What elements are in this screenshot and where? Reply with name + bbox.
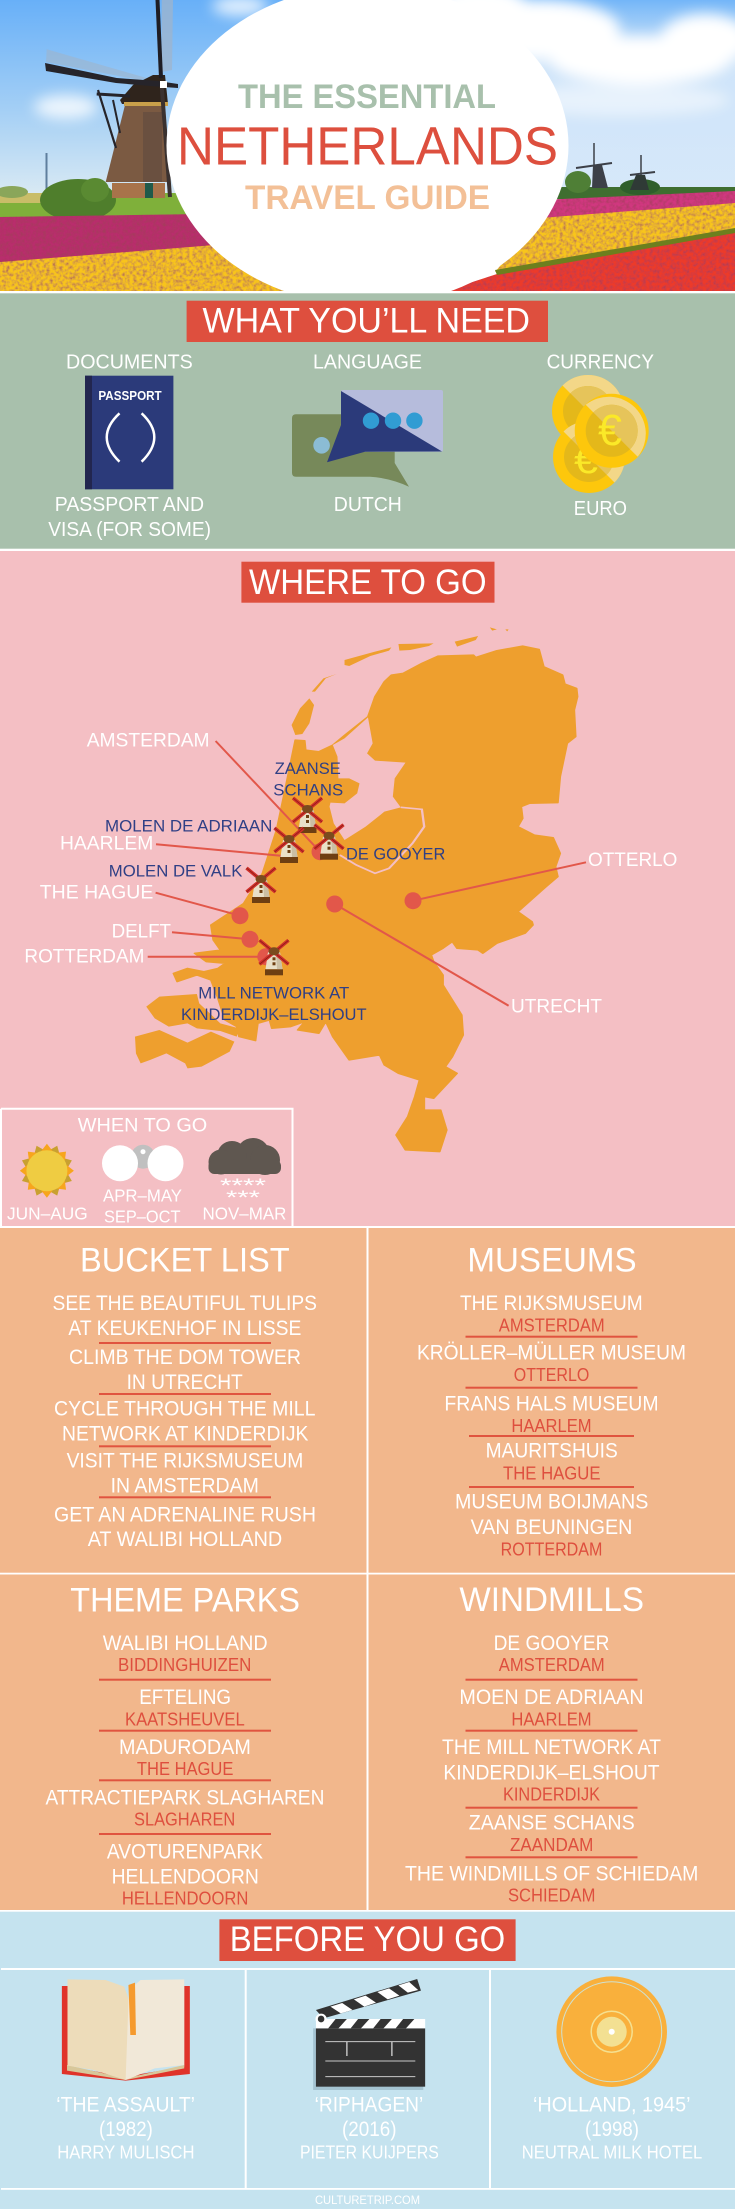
footer: culturetrip.com: CULTURETRIP.COM <box>315 2195 420 2207</box>
distant windmills <box>593 143 595 168</box>
city labels: THE HAGUE <box>40 881 153 903</box>
panel: windmills <box>368 1574 735 1910</box>
windmill labels: MOLEN DE VALK <box>109 861 243 880</box>
text: the assault: (1982) <box>99 2118 153 2141</box>
white separator under hero <box>0 291 735 293</box>
icon: windmill Molen de Valk <box>246 868 276 903</box>
windmill items: ZAANSE SCHANS <box>469 1812 635 1835</box>
city labels: ROTTERDAM <box>24 946 144 968</box>
heading: where to go: WHERE TO GO <box>249 563 487 602</box>
icon: passport <box>85 376 173 489</box>
title line: Travel Guide: TRAVEL GUIDE <box>245 179 490 217</box>
label: documents: DOCUMENTS <box>66 352 193 374</box>
bucket list items: AT KEUKENHOF IN LISSE <box>68 1317 301 1340</box>
theme park items: WALIBI HOLLAND <box>103 1632 268 1655</box>
theme park items <box>46 1632 324 1908</box>
windmill items: AMSTERDAM <box>499 1655 605 1675</box>
bucket list items: IN UTRECHT <box>127 1371 243 1394</box>
windmill items: ZAANDAM <box>510 1835 593 1855</box>
museum items: THE RIJKSMUSEUM <box>460 1292 643 1315</box>
icon: vinyl record <box>556 1976 667 2087</box>
line: amsterdam <box>216 741 320 852</box>
city labels <box>24 730 677 1018</box>
label: currency: CURRENCY <box>547 352 654 374</box>
title line: Netherlands: NETHERLANDS <box>177 116 558 176</box>
theme park items: ATTRACTIEPARK SLAGHAREN <box>46 1786 324 1809</box>
panel: what you'll need <box>0 293 735 549</box>
line: otterlo <box>413 862 586 901</box>
theme park items: THE HAGUE <box>137 1759 233 1779</box>
panel: museums <box>368 1228 735 1573</box>
text: riphagen: (2016) <box>342 2118 397 2141</box>
theme park items: MADURODAM <box>119 1736 251 1759</box>
icon: passport: PASSPORT <box>98 389 162 403</box>
line: utrecht <box>335 904 509 1006</box>
windmill items <box>405 1632 698 1906</box>
icon: windmill De Gooyer <box>314 825 344 860</box>
text: the assault: ‘THE ASSAULT’ <box>56 2094 195 2117</box>
windmill labels: MOLEN DE ADRIAAN <box>105 817 272 836</box>
museum items: MAURITSHUIS <box>486 1440 618 1463</box>
museum items: HAARLEM <box>511 1416 592 1436</box>
map of the Netherlands <box>135 627 578 1152</box>
museum items: OTTERLO <box>514 1365 589 1385</box>
theme park items: HELLENDOORN <box>122 1888 248 1908</box>
text: dutch: DUTCH <box>334 494 402 516</box>
city labels: AMSTERDAM <box>87 730 210 752</box>
icon: open book <box>62 1979 190 2081</box>
text: holland, 1945: ‘HOLLAND, 1945’ <box>533 2094 690 2117</box>
icon: clouds <box>102 1145 184 1181</box>
heading: theme parks: THEME PARKS <box>70 1582 300 1620</box>
city labels: DELFT <box>112 921 171 943</box>
season labels <box>7 1186 286 1227</box>
museum items: KRÖLLER–MÜLLER MUSEUM <box>417 1341 686 1364</box>
windmill labels: KINDERDIJK–ELSHOUT <box>181 1005 367 1024</box>
season labels: NOV–MAR <box>202 1203 286 1223</box>
bucket list items: NETWORK AT KINDERDIJK <box>62 1423 308 1446</box>
icon: euro coins: € <box>598 406 622 455</box>
windmill items: MOEN DE ADRIAAN <box>459 1686 644 1709</box>
icon: snow cloud: **** <box>220 1176 267 1197</box>
text: riphagen <box>300 2094 439 2162</box>
icon: windmill Zaanse Schans <box>293 798 322 833</box>
icon: euro coins <box>552 375 649 493</box>
theme park items: BIDDINGHUIZEN <box>118 1655 251 1675</box>
bucket list items: AT WALIBI HOLLAND <box>88 1528 282 1551</box>
city labels: OTTERLO <box>588 849 677 871</box>
heading: when to go: WHEN TO GO <box>78 1115 207 1137</box>
text: passport and visa: PASSPORT AND <box>55 494 204 516</box>
heading: windmills: WINDMILLS <box>459 1581 644 1619</box>
theme park items: SLAGHAREN <box>134 1810 235 1830</box>
text: holland, 1945: (1998) <box>585 2118 639 2141</box>
city labels: UTRECHT <box>511 996 602 1018</box>
theme park items: KAATSHEUVEL <box>125 1709 245 1729</box>
windmill items: THE WINDMILLS OF SCHIEDAM <box>405 1863 698 1886</box>
icon: windmill Molen de Adriaan <box>274 828 304 863</box>
text: riphagen: ‘RIPHAGEN’ <box>315 2094 423 2117</box>
text: the assault: HARRY MULISCH <box>57 2142 195 2162</box>
bucket list items <box>52 1292 317 1551</box>
icon: snow cloud: *** <box>226 1188 261 1209</box>
city labels: HAARLEM <box>60 832 153 854</box>
line: the hague <box>156 893 240 916</box>
season labels: APR–MAY <box>103 1186 182 1206</box>
text: euro: EURO <box>574 498 627 520</box>
callout lines <box>148 741 586 1006</box>
museum items: VAN BEUNINGEN <box>471 1516 632 1539</box>
hero photo: windmill and tulip fields <box>0 0 735 291</box>
bucket list items: IN AMSTERDAM <box>111 1474 259 1497</box>
bucket list items: CYCLE THROUGH THE MILL <box>54 1397 316 1420</box>
heading: museums: MUSEUMS <box>467 1242 637 1280</box>
museum items: ROTTERDAM <box>501 1539 602 1559</box>
panel: bucket list <box>0 1228 366 1573</box>
icon: film clapperboard <box>313 1979 425 2090</box>
text: passport and visa: VISA (FOR SOME) <box>48 519 211 541</box>
theme park items: HELLENDOORN <box>112 1865 259 1888</box>
windmill items: DE GOOYER <box>494 1632 609 1655</box>
windmill labels: SCHANS <box>273 781 343 800</box>
panel: where to go <box>0 551 735 1227</box>
bucket list items: VISIT THE RIJKSMUSEUM <box>67 1449 303 1472</box>
theme park items: AVOTURENPARK <box>107 1840 263 1863</box>
line: delft <box>172 932 250 939</box>
icon: snow cloud <box>208 1138 281 1209</box>
line: haarlem <box>156 844 281 856</box>
hero title circle <box>166 0 568 306</box>
windmill items: THE MILL NETWORK AT <box>442 1736 661 1759</box>
text: riphagen: PIETER KUIJPERS <box>300 2142 439 2162</box>
title line: The Essential: THE ESSENTIAL <box>238 78 496 116</box>
icon: speech bubbles <box>292 390 443 487</box>
windmill labels <box>105 759 445 1024</box>
museum items: THE HAGUE <box>503 1463 600 1483</box>
line: rotterdam <box>148 956 266 958</box>
bucket list items: CLIMB THE DOM TOWER <box>69 1346 301 1369</box>
windmill labels: DE GOOYER <box>346 844 445 863</box>
main windmill <box>112 183 165 198</box>
bucket list items: GET AN ADRENALINE RUSH <box>54 1503 316 1526</box>
panel: theme parks <box>0 1574 366 1910</box>
windmill items: KINDERDIJK–ELSHOUT <box>443 1761 660 1784</box>
label: language: LANGUAGE <box>313 352 422 374</box>
season labels: SEP–OCT <box>104 1207 181 1227</box>
text: passport and visa <box>48 494 211 541</box>
theme park items: EFTELING <box>139 1686 231 1709</box>
windmill items: KINDERDIJK <box>503 1784 600 1804</box>
heading: before you go: BEFORE YOU GO <box>230 1920 505 1959</box>
museum items: AMSTERDAM <box>499 1316 605 1336</box>
panel: before you go <box>0 1912 735 2209</box>
icon: sun <box>12 1135 82 1206</box>
museum items: FRANS HALS MUSEUM <box>444 1393 659 1416</box>
season labels: JUN–AUG <box>7 1203 88 1223</box>
museum items <box>417 1292 686 1559</box>
windmill items: HAARLEM <box>511 1709 592 1729</box>
bucket list items: SEE THE BEAUTIFUL TULIPS <box>52 1292 317 1315</box>
windmill labels: ZAANSE <box>275 759 341 778</box>
icon: euro coins: € <box>574 440 598 482</box>
city dots <box>232 843 422 965</box>
text: the assault <box>56 2094 195 2162</box>
icon: windmill Kinderdijk <box>260 940 288 975</box>
panel: when to go <box>1 1109 292 1227</box>
heading: what you'll need: WHAT YOU’LL NEED <box>202 301 530 340</box>
heading: bucket list: BUCKET LIST <box>80 1242 290 1280</box>
windmill labels: MILL NETWORK AT <box>198 983 349 1002</box>
text: holland, 1945: NEUTRAL MILK HOTEL <box>522 2142 702 2162</box>
windmill items: SCHIEDAM <box>508 1886 595 1906</box>
museum items: MUSEUM BOIJMANS <box>455 1491 648 1514</box>
text: holland, 1945 <box>522 2094 702 2162</box>
